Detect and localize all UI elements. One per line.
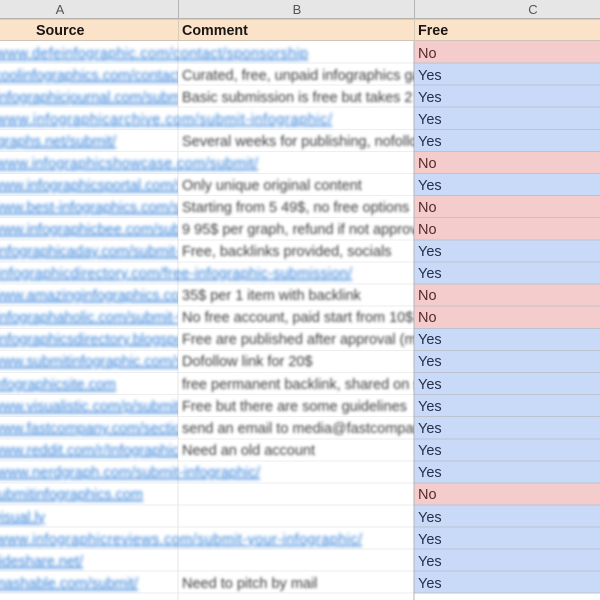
comment column notes: Free but there are some guidelines [182,399,407,415]
free column values: Yes [418,377,442,393]
free column values: Yes [418,112,442,128]
free column values: Yes [418,554,442,570]
free column values: Yes [418,244,442,260]
free column values: No [418,487,437,503]
table header row: Source [36,23,85,39]
free column values: No [418,288,437,304]
column letter bar: C [528,2,538,17]
source column links [0,46,363,592]
comment column notes: Basic submission is free but takes 2 weeks [182,90,458,106]
comment column notes: Free, backlinks provided, socials [182,244,392,260]
free column values: Yes [418,354,442,370]
source column links: www.infographicarchive.com/submit-infographic/ [0,112,333,128]
column letter bar [0,0,600,20]
source column links: www.defeinfographic.com/contact/sponsorship [0,46,308,62]
free column values: Yes [418,134,442,150]
free column values: No [418,222,437,238]
free column values: Yes [418,510,442,526]
table header row [0,19,600,41]
free column values: Yes [418,332,442,348]
free column status cells [414,41,600,593]
comment column notes: No free account, paid start from 10$ per item [182,310,470,326]
free column values: Yes [418,443,442,459]
comment column notes: 35$ per 1 item with backlink [182,288,362,304]
comment column notes: Starting from 5 49$, no free options [182,200,409,216]
comment column notes: Need to pitch by mail [182,576,317,592]
table header row: Free [418,23,448,39]
comment column notes: Several weeks for publishing, nofollow link [182,134,454,150]
source column links: www.infographicshowcase.com/submit/ [0,156,259,172]
comment column notes: Need an old account [182,443,315,459]
column letter bar: B [293,2,301,17]
free column values: Yes [418,421,442,437]
free column values: Yes [418,178,442,194]
comment column notes: free permanent backlink, shared on social [182,377,450,393]
free column values: Yes [418,266,442,282]
comment column notes: 9 95$ per graph, refund if not approved [182,222,434,238]
source column links: www.infographicreviews.com/submit-your-infographic/ [0,532,363,548]
column letter bar: A [56,2,65,17]
source column links: infographicjournal.com/submit-infographic [0,90,264,106]
comment column notes: send an email to media@fastcompany.com [182,421,459,437]
free column values: No [418,46,437,62]
source column links: www.nerdgraph.com/submit-infographic/ [0,465,261,481]
free column values: No [418,310,437,326]
source column links: infographicsdirectory.blogspot.com [0,332,219,348]
free column values: No [418,200,437,216]
comment column notes: Curated, free, unpaid infographics gallery [182,68,448,84]
comment column notes [180,67,414,593]
free column values: Yes [418,532,442,548]
free column values: Yes [418,68,442,84]
source column links: coolinfographics.com/contact/submit-infographic [0,68,303,84]
free column values [418,46,442,592]
free column values: Yes [418,465,442,481]
source column links: infographicaday.com/submit-infographic [0,244,251,260]
source column links: infographaholic.com/submit-your-own [0,310,237,326]
free column values: No [418,156,437,172]
table header row: Comment [182,23,248,39]
free column values: Yes [418,399,442,415]
comment column notes: Only unique original content [182,178,362,194]
source column links: infographicdirectory.com/free-infographic-submission/ [0,266,353,282]
comment column notes: Dofollow link for 20$ [182,354,313,370]
free column values: Yes [418,90,442,106]
comment column notes: Free are published after approval (may take [182,332,463,348]
free column values: Yes [418,576,442,592]
